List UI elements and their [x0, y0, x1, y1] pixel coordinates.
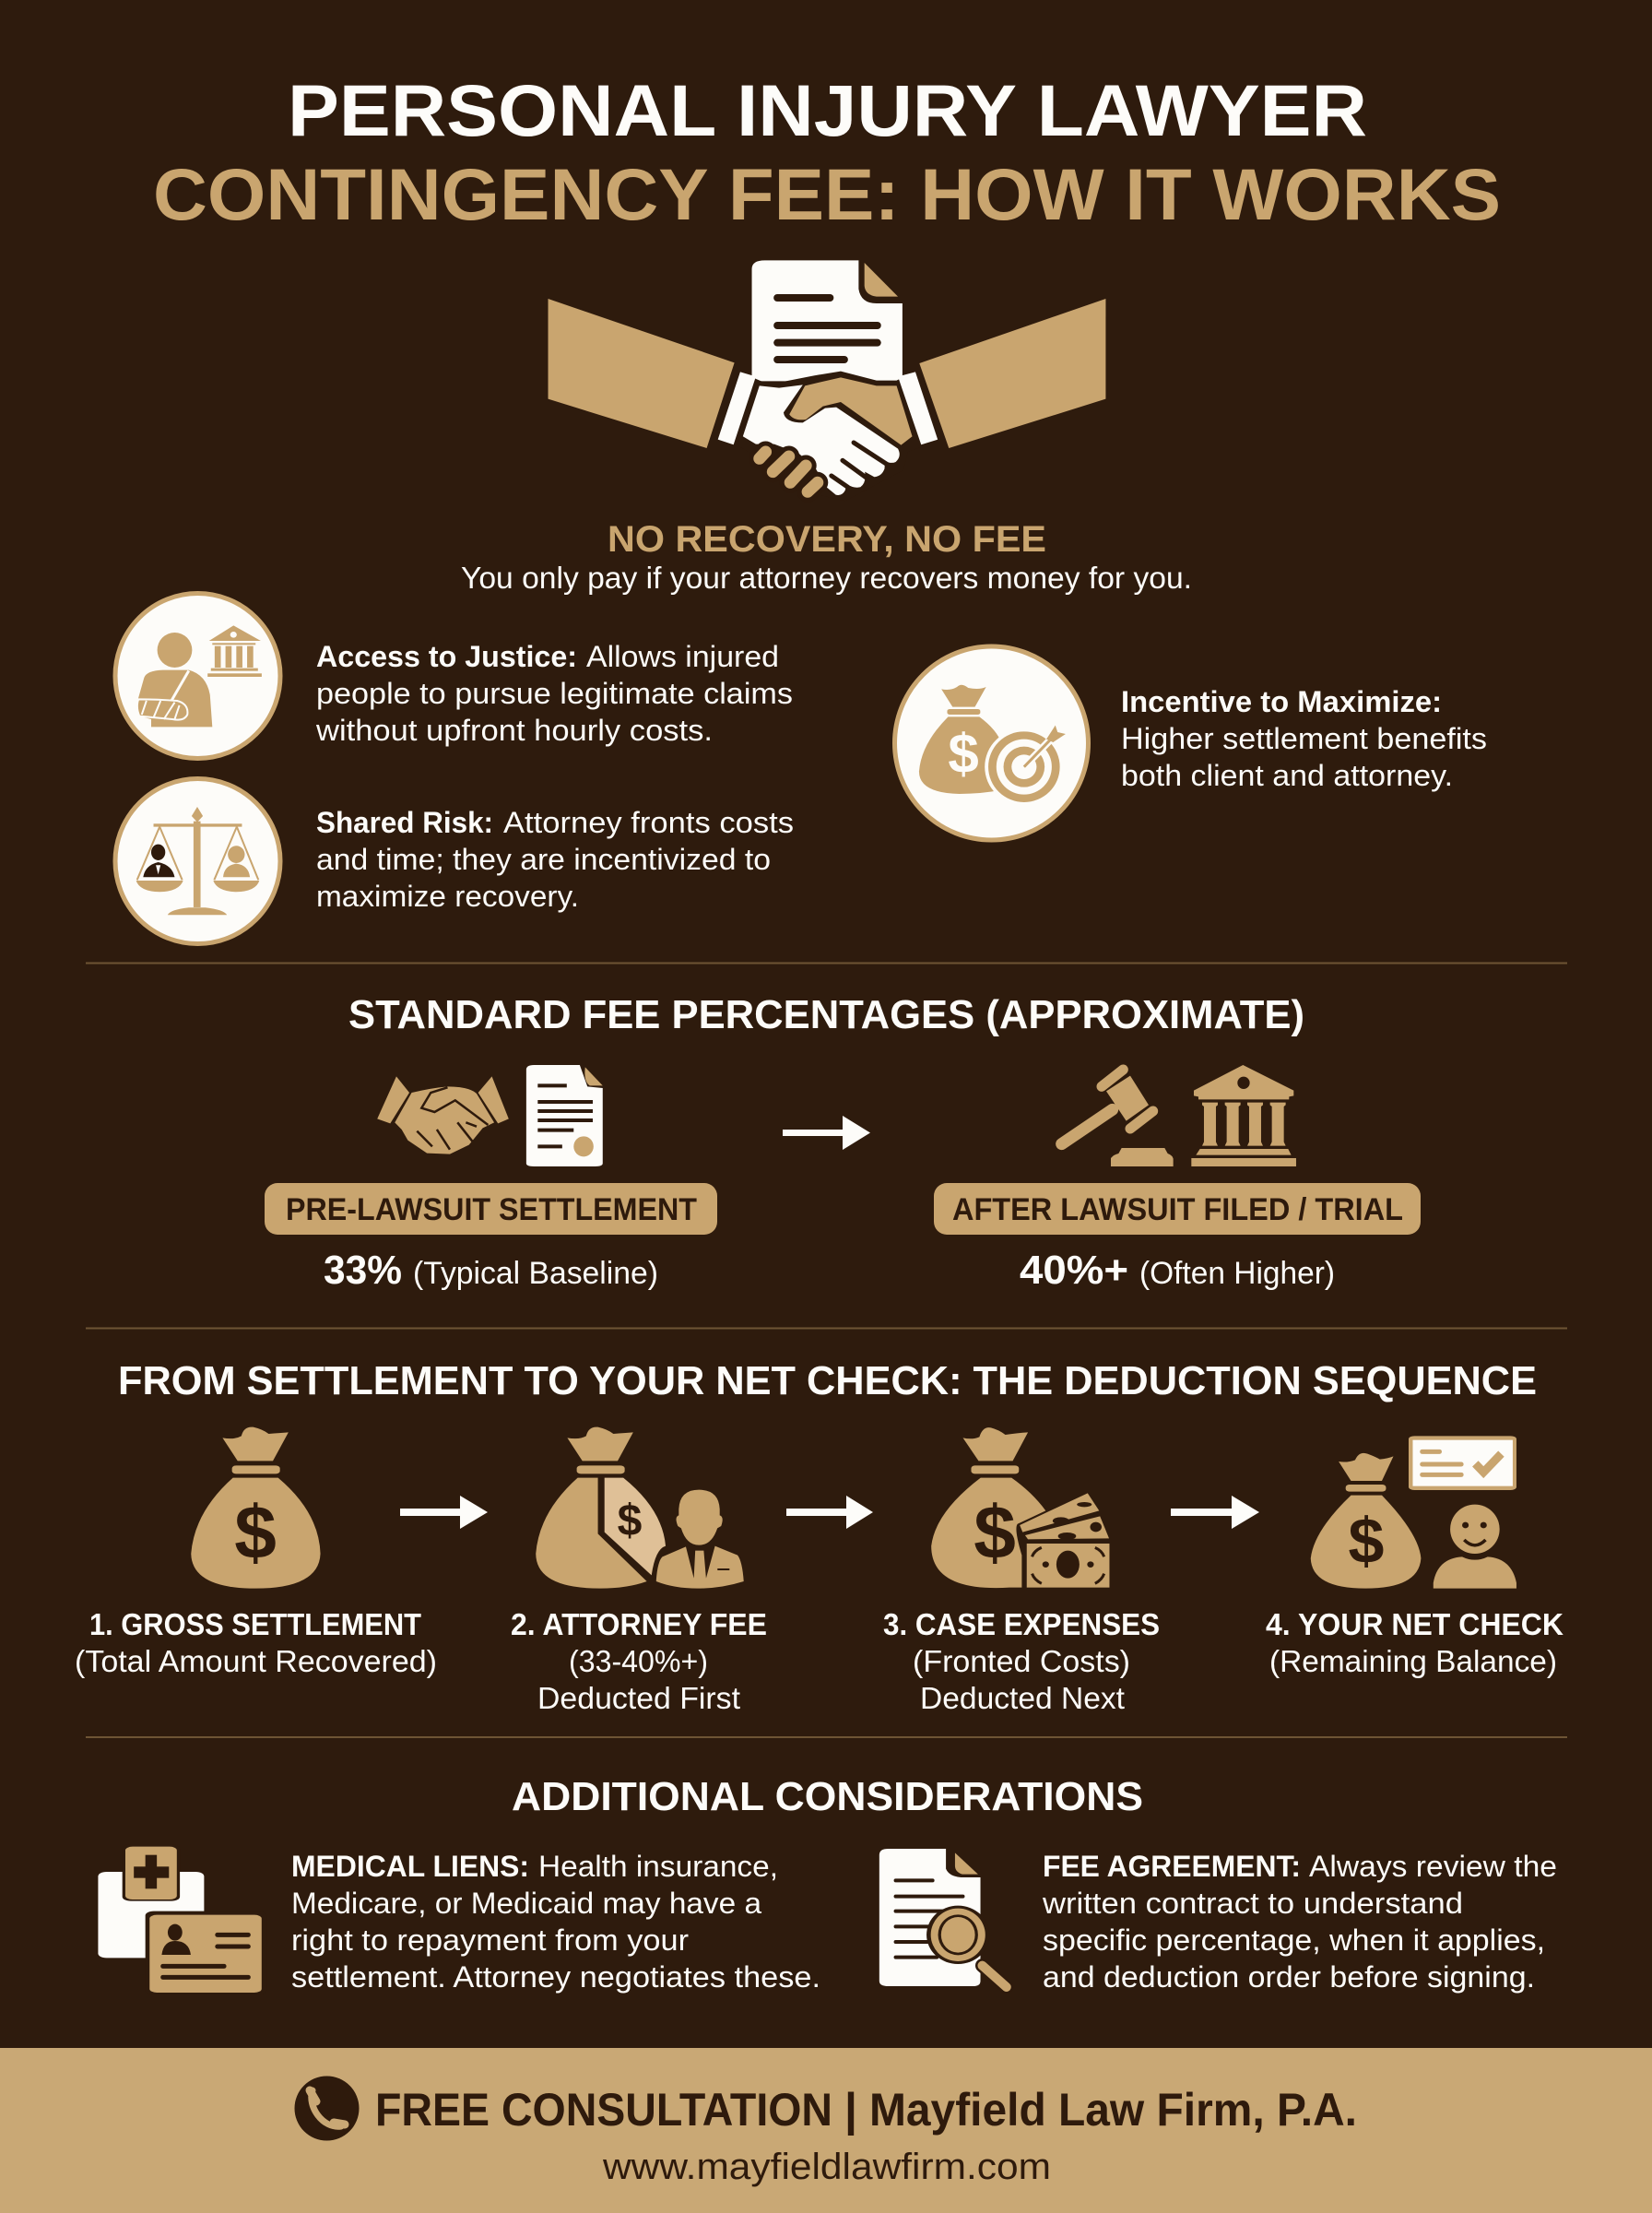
label: 4. YOUR NET CHECK [1266, 1607, 1564, 1641]
text: access to justice: without upfront hourly costs. [315, 714, 713, 747]
stat: 33% typical baseline [324, 1248, 658, 1293]
label: 3. CASE EXPENSES [883, 1607, 1160, 1641]
label [511, 1607, 767, 1715]
text: fee agreement: specific percentage, when it applies, [1043, 1923, 1545, 1957]
text: incentive to maximize: Incentive to Maximize: [1121, 685, 1442, 718]
icon: money bag [191, 1427, 321, 1589]
text: fee agreement: written contract to understand [1042, 1887, 1463, 1920]
panel: fee agreement [879, 1849, 1557, 1994]
arrow: step 1 to 2 [400, 1496, 488, 1529]
text: free consultation [375, 2084, 1357, 2136]
text: medical liens: Medicare, or Medicaid may have a [291, 1887, 761, 1920]
panel: incentive to maximize [894, 646, 1487, 840]
icon: split money bag and attorney: $ [618, 1497, 643, 1545]
label: Deducted First [537, 1681, 740, 1715]
label [1266, 1607, 1564, 1678]
icon: injured person and courthouse [115, 594, 280, 758]
stat: 40%+ often higher [1020, 1248, 1335, 1293]
arrow: pre-lawsuit to lawsuit [783, 1116, 870, 1150]
text: access to justice: people to pursue legitimate claims [316, 677, 793, 710]
stat: 33% typical baseline: 33% [324, 1248, 402, 1293]
text: medical liens: MEDICAL LIENS: [291, 1850, 529, 1883]
text: shared risk: and time; they are incentivized to [316, 843, 771, 876]
icon: gavel and courthouse [1062, 1065, 1296, 1166]
label [75, 1607, 437, 1678]
callout: no recovery, no fee: NO RECOVERY, NO FEE [608, 519, 1046, 560]
stat: 33% typical baseline: (Typical Baseline) [413, 1256, 658, 1291]
text: medical liens: Health insurance, [538, 1850, 778, 1883]
callout: no recovery, no fee: You only pay if your attorney recovers money for you. [461, 561, 1192, 595]
label pill: after lawsuit filed: AFTER LAWSUIT FILED / TRIAL [952, 1192, 1403, 1227]
label: (Fronted Costs) [913, 1644, 1130, 1678]
icon: medical cards [98, 1844, 266, 1994]
title: CONTINGENCY FEE: HOW IT WORKS [153, 153, 1501, 235]
step 2: attorney fee [511, 1427, 767, 1715]
arrow: step 2 to 3 [786, 1496, 873, 1529]
step 3: case expenses [883, 1427, 1160, 1715]
label pill: pre-lawsuit settlement: PRE-LAWSUIT SETTLEMENT [286, 1192, 697, 1227]
text: shared risk: Attorney fronts costs [503, 806, 794, 839]
text: medical liens: right to repayment from your [291, 1923, 689, 1957]
text: medical liens [291, 1850, 820, 1994]
footer band [0, 2048, 1652, 2213]
text: access to justice: Access to Justice: [316, 640, 577, 673]
title [153, 69, 1501, 235]
label: Deducted Next [920, 1681, 1125, 1715]
title: PERSONAL INJURY LAWYER [288, 69, 1367, 151]
heading: standard fee percentages: STANDARD FEE PERCENTAGES (APPROXIMATE) [348, 992, 1304, 1037]
text: medical liens: settlement. Attorney negotiates these. [291, 1960, 820, 1994]
icon: money bag and cash: $ [974, 1491, 1016, 1575]
icon: money bag: $ [234, 1491, 277, 1575]
icon: document and magnifier [879, 1849, 1007, 1987]
icon: money bag, check and client [1311, 1436, 1516, 1589]
icon: split money bag and attorney [536, 1427, 744, 1589]
text: fee agreement: and deduction order before signing. [1043, 1960, 1535, 1994]
icon: phone [295, 2077, 360, 2141]
text: free consultation: FREE CONSULTATION [375, 2084, 832, 2136]
label pill: pre-lawsuit settlement [265, 1183, 717, 1235]
heading: additional considerations: ADDITIONAL CONSIDERATIONS [512, 1774, 1143, 1819]
panel: medical liens [98, 1844, 820, 1994]
label: 1. GROSS SETTLEMENT [89, 1607, 421, 1641]
text: access to justice: Allows injured [586, 640, 779, 673]
callout: no recovery, no fee [461, 519, 1192, 595]
text: shared risk: Shared Risk: [316, 806, 493, 839]
icon: scales with attorney and client [115, 778, 280, 944]
text: incentive to maximize: Higher settlement benefits [1121, 722, 1487, 755]
label: (Total Amount Recovered) [75, 1644, 437, 1678]
text: incentive to maximize: both client and attorney. [1121, 759, 1453, 792]
icon: money bag and target [894, 646, 1088, 840]
text: shared risk [316, 806, 794, 913]
text: fee agreement: Always review the [1309, 1850, 1557, 1883]
panel: after lawsuit filed [934, 1065, 1421, 1293]
stat: 40%+ often higher: 40%+ [1020, 1248, 1128, 1293]
text: free consultation: | [844, 2084, 857, 2136]
icon: handshake and contract [377, 1065, 603, 1166]
icon: money bag and cash [931, 1427, 1109, 1588]
label pill: after lawsuit filed [934, 1183, 1421, 1235]
text: free consultation: Mayfield Law Firm, P.A. [869, 2084, 1357, 2136]
text: website: www.mayfieldlawfirm.com [602, 2147, 1051, 2187]
step 4: your net check [1266, 1436, 1564, 1678]
stat: 40%+ often higher: (Often Higher) [1139, 1256, 1335, 1291]
text: shared risk: maximize recovery. [316, 880, 579, 913]
text: incentive to maximize [1121, 685, 1487, 792]
label: (Remaining Balance) [1269, 1644, 1557, 1678]
label: (33-40%+) [569, 1644, 708, 1678]
icon: money bag and target: $ [948, 723, 979, 785]
panel: shared risk [115, 778, 794, 944]
panel: pre-lawsuit settlement [265, 1065, 717, 1293]
text: access to justice [315, 640, 793, 747]
icon: handshake with document [549, 260, 1105, 501]
label: 2. ATTORNEY FEE [511, 1607, 767, 1641]
text: fee agreement: FEE AGREEMENT: [1043, 1850, 1301, 1883]
text: fee agreement [1042, 1850, 1557, 1994]
arrow: step 3 to 4 [1171, 1496, 1259, 1529]
panel: access to justice [115, 594, 793, 758]
label [883, 1607, 1160, 1715]
step 1: gross settlement [75, 1427, 437, 1678]
heading: deduction sequence: FROM SETTLEMENT TO YOUR NET CHECK: THE DEDUCTION SEQUENCE [118, 1358, 1537, 1403]
icon: money bag, check and client: $ [1349, 1505, 1384, 1577]
